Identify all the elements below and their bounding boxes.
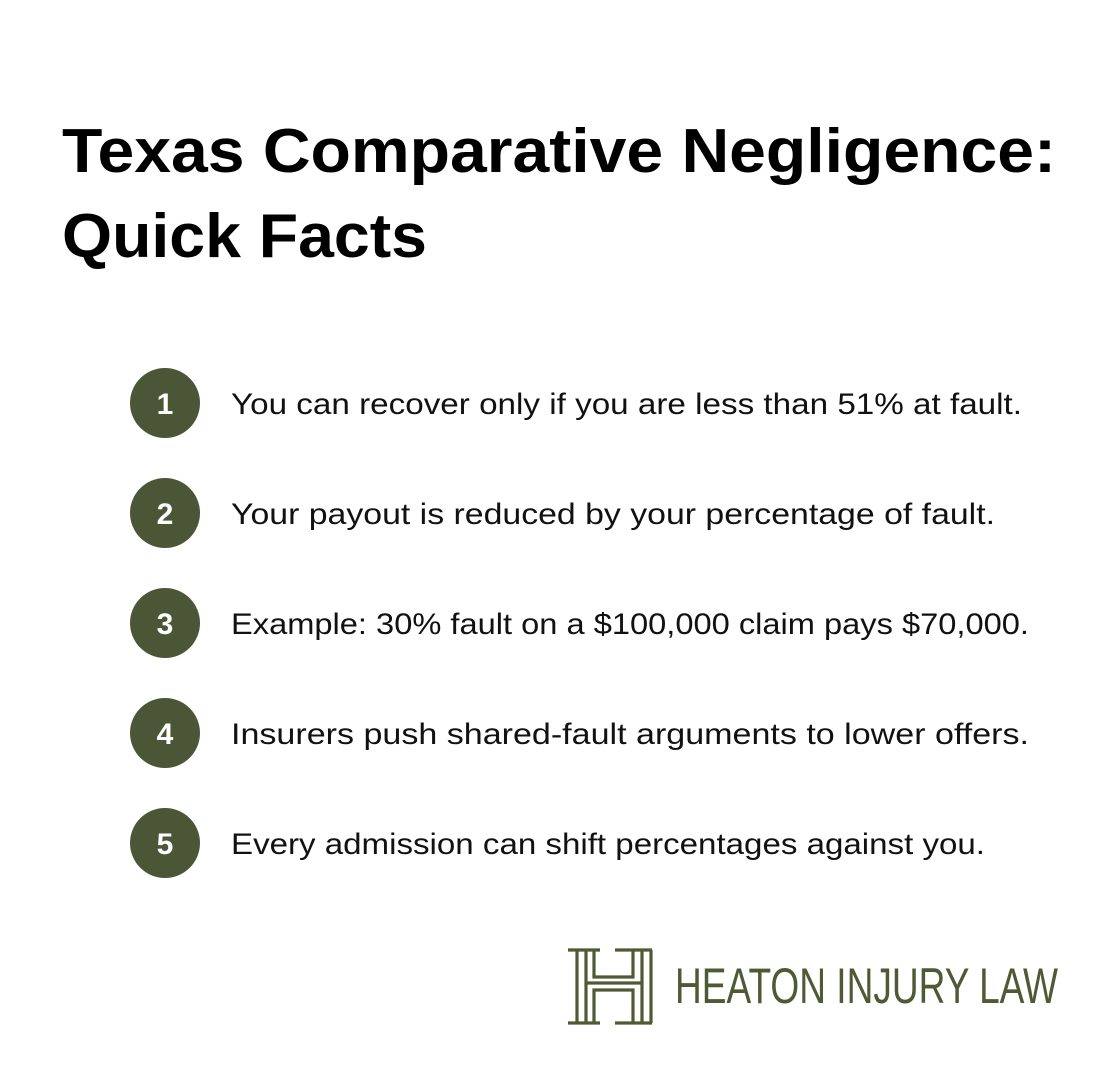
fact 5: Every admission can shift percentages against you. — [231, 828, 985, 861]
fact 4: Insurers push shared-fault arguments to lower offers. — [231, 718, 1029, 751]
fact 3 — [130, 588, 1029, 658]
fact 5 — [130, 808, 985, 878]
title: Quick Facts — [62, 202, 427, 271]
fact 3: 3 — [157, 608, 173, 641]
title — [62, 117, 1056, 271]
fact 1: You can recover only if you are less than 51% at fault. — [231, 388, 1022, 421]
fact 4 — [130, 698, 1029, 768]
fact 4: 4 — [157, 718, 174, 751]
fact 1 — [130, 368, 1022, 438]
fact 1: 1 — [157, 388, 173, 421]
fact 3: Example: 30% fault on a $100,000 claim pays $70,000. — [231, 608, 1029, 641]
fact 5: 5 — [157, 828, 173, 861]
fact 2 — [130, 478, 995, 548]
icon: H monogram — [568, 950, 652, 1023]
title: Texas Comparative Negligence: — [62, 117, 1056, 186]
fact 2: Your payout is reduced by your percentage of fault. — [231, 498, 995, 531]
fact 2: 2 — [157, 498, 173, 531]
logo — [568, 950, 1059, 1023]
list of facts — [130, 368, 1029, 878]
